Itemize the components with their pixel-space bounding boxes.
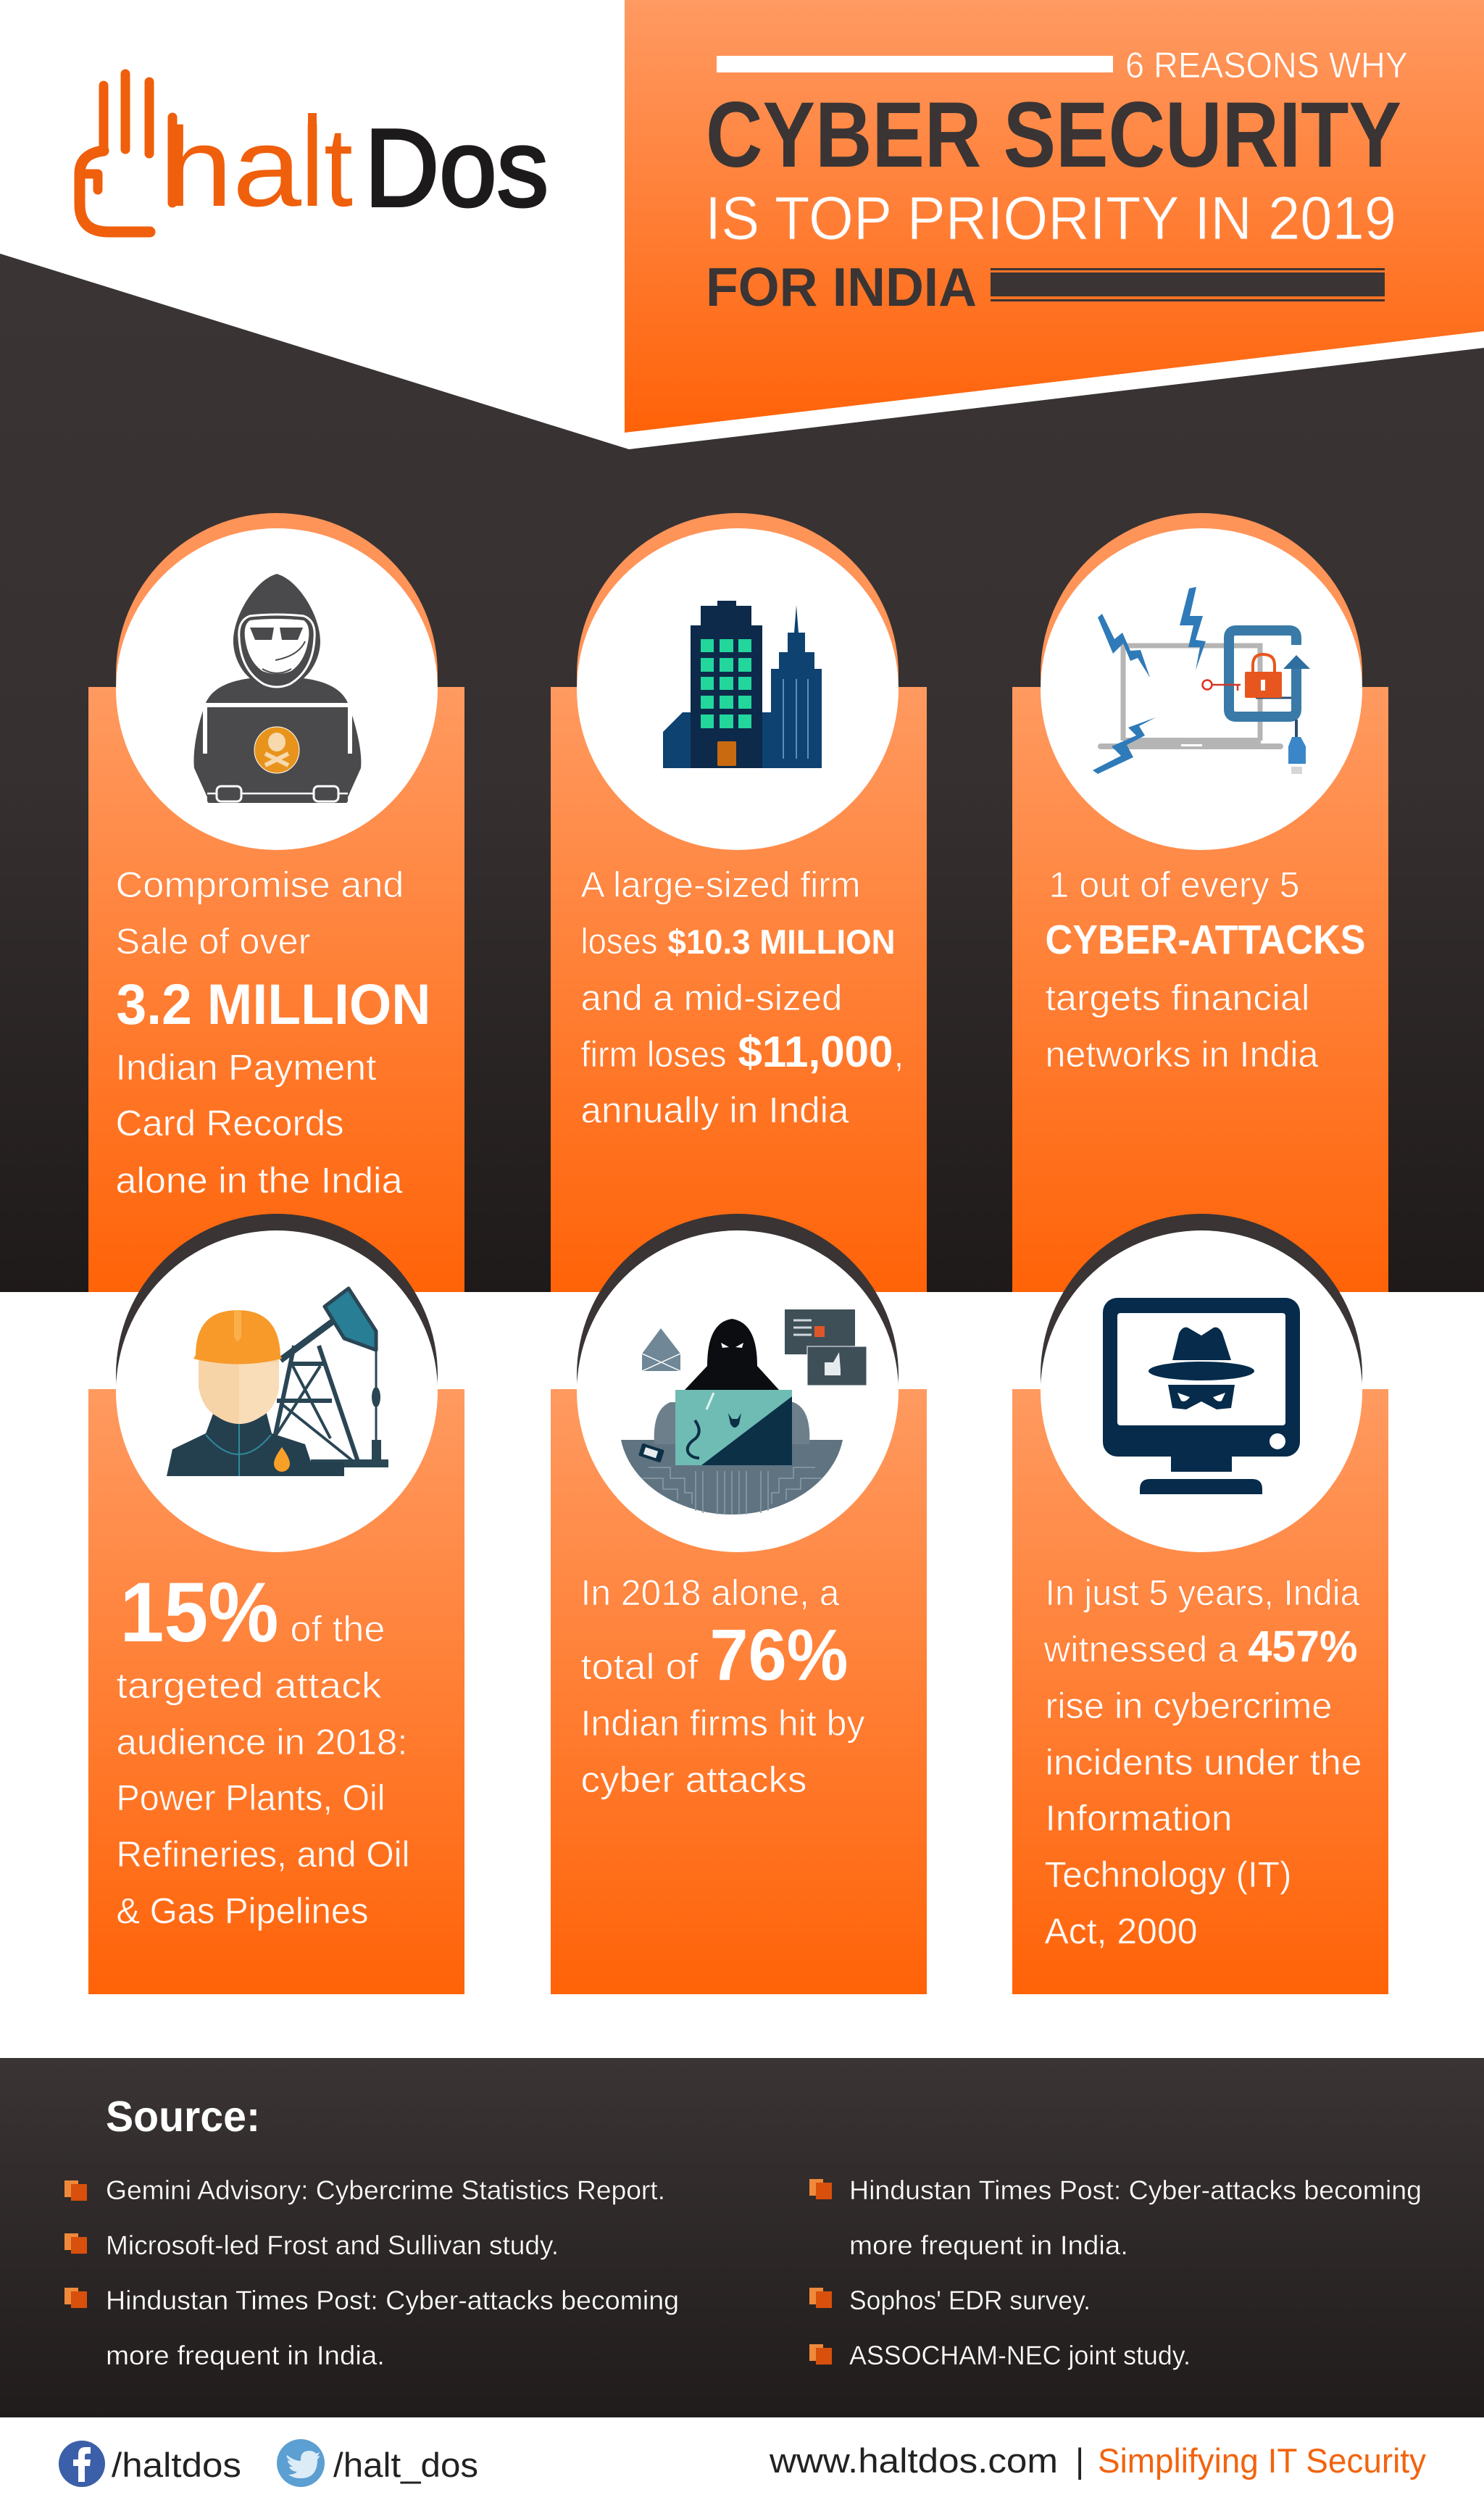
divider: | bbox=[1075, 2441, 1084, 2480]
source list left: Microsoft-led Frost and Sullivan study. bbox=[106, 2230, 559, 2260]
wordmark: lt bbox=[301, 104, 353, 230]
icon: hacker with laptop and malware bbox=[621, 1309, 867, 1515]
card text: and a mid-sized bbox=[581, 978, 842, 1018]
card text: of the bbox=[290, 1609, 385, 1649]
card text: Sale of over bbox=[116, 921, 310, 962]
icon: twitter bbox=[277, 2439, 325, 2487]
source list right: more frequent in India. bbox=[849, 2230, 1128, 2260]
card text: Card Records bbox=[116, 1103, 343, 1143]
card text: In 2018 alone, a bbox=[581, 1572, 840, 1613]
icon: laptop with padlock and lightning bbox=[1093, 587, 1310, 774]
card text: Refineries, and Oil bbox=[116, 1834, 410, 1875]
card text bbox=[116, 1565, 410, 1931]
card text: Technology (IT) bbox=[1045, 1854, 1291, 1895]
wordmark: Dos bbox=[364, 107, 549, 230]
icon: masked spy on monitor bbox=[1103, 1298, 1300, 1494]
source list right: ASSOCHAM-NEC joint study. bbox=[849, 2341, 1191, 2370]
panel: card 4 bbox=[88, 1214, 464, 1994]
source list right: Hindustan Times Post: Cyber-attacks becoming bbox=[849, 2175, 1422, 2205]
panel: card 1 bbox=[88, 513, 464, 1292]
card text: CYBER-ATTACKS bbox=[1045, 917, 1365, 963]
card text: audience in 2018: bbox=[116, 1722, 407, 1762]
card text: networks in India bbox=[1045, 1034, 1319, 1075]
bullets bbox=[64, 2179, 832, 2365]
panel: title banner bbox=[625, 0, 1484, 433]
card text: Indian Payment bbox=[116, 1047, 377, 1088]
card text: Compromise and bbox=[116, 865, 404, 905]
tagline: Simplifying IT Security bbox=[1098, 2441, 1426, 2480]
heading: Source: bbox=[106, 2093, 260, 2141]
card text: In just 5 years, India bbox=[1045, 1572, 1360, 1613]
dark rule bbox=[991, 268, 1385, 301]
card text: Indian firms hit by bbox=[581, 1703, 865, 1743]
card text: rise in cybercrime bbox=[1045, 1686, 1332, 1726]
source list right: Sophos' EDR survey. bbox=[849, 2286, 1091, 2315]
kicker: 6 REASONS WHY bbox=[1125, 45, 1408, 86]
title line 3: FOR INDIA bbox=[706, 257, 977, 317]
card text: Information bbox=[1045, 1798, 1232, 1838]
card text: & Gas Pipelines bbox=[116, 1891, 368, 1931]
source list right bbox=[849, 2175, 1422, 2370]
panel: sources bbox=[0, 2058, 1484, 2417]
card text: cyber attacks bbox=[581, 1759, 807, 1800]
card text: Act, 2000 bbox=[1045, 1911, 1197, 1951]
panel: card 6 bbox=[1012, 1214, 1388, 1994]
card text bbox=[1043, 1572, 1362, 1951]
footer bbox=[59, 2439, 1426, 2487]
icon: facebook bbox=[59, 2441, 105, 2487]
card text: incidents under the bbox=[1045, 1742, 1362, 1783]
card text: $11,000 bbox=[738, 1028, 893, 1076]
card text: 1 out of every 5 bbox=[1049, 865, 1300, 905]
card text: A large-sized firm bbox=[581, 865, 861, 905]
card text: , bbox=[894, 1034, 904, 1075]
card text: loses bbox=[581, 921, 658, 962]
card text bbox=[581, 865, 904, 1130]
card text: annually in India bbox=[581, 1090, 849, 1130]
facebook handle: /haltdos bbox=[112, 2446, 241, 2484]
panel: card 3 bbox=[1012, 513, 1388, 1292]
icon: hand bbox=[80, 74, 172, 232]
card text bbox=[581, 1572, 865, 1800]
card text: 76% bbox=[710, 1615, 848, 1696]
card text: total of bbox=[581, 1646, 699, 1687]
card text: firm loses bbox=[581, 1034, 726, 1075]
card text: alone in the India bbox=[116, 1160, 403, 1201]
dark background band bbox=[0, 254, 1484, 1292]
card text: witnessed a bbox=[1043, 1629, 1238, 1670]
card text: 457% bbox=[1248, 1622, 1358, 1671]
card text: targeted attack bbox=[116, 1665, 383, 1706]
panel: card 2 bbox=[551, 513, 927, 1292]
card text: 3.2 MILLION bbox=[116, 972, 430, 1036]
source list left: Hindustan Times Post: Cyber-attacks becoming bbox=[106, 2286, 679, 2315]
wordmark: ha bbox=[164, 104, 302, 230]
icon: hooded hacker at laptop bbox=[194, 574, 361, 803]
card text: Power Plants, Oil bbox=[116, 1778, 385, 1818]
white rule bbox=[717, 56, 1113, 72]
card text bbox=[1045, 865, 1365, 1075]
twitter handle: /halt_dos bbox=[333, 2446, 478, 2484]
source list left: Gemini Advisory: Cybercrime Statistics Report. bbox=[106, 2175, 665, 2205]
source list left bbox=[106, 2175, 679, 2370]
wordmark bbox=[164, 104, 549, 230]
panel: card 5 bbox=[551, 1214, 927, 1994]
website: www.haltdos.com bbox=[769, 2441, 1058, 2480]
title line 2: IS TOP PRIORITY IN 2019 bbox=[705, 184, 1396, 252]
card text bbox=[116, 865, 430, 1201]
card text: $10.3 MILLION bbox=[668, 922, 896, 961]
icon: oil worker and pump bbox=[167, 1288, 388, 1476]
logo: haltDos bbox=[80, 74, 549, 232]
icon: office buildings bbox=[663, 601, 822, 768]
card text: 15% bbox=[120, 1565, 278, 1659]
card text: targets financial bbox=[1045, 978, 1310, 1018]
source list left: more frequent in India. bbox=[106, 2341, 385, 2370]
